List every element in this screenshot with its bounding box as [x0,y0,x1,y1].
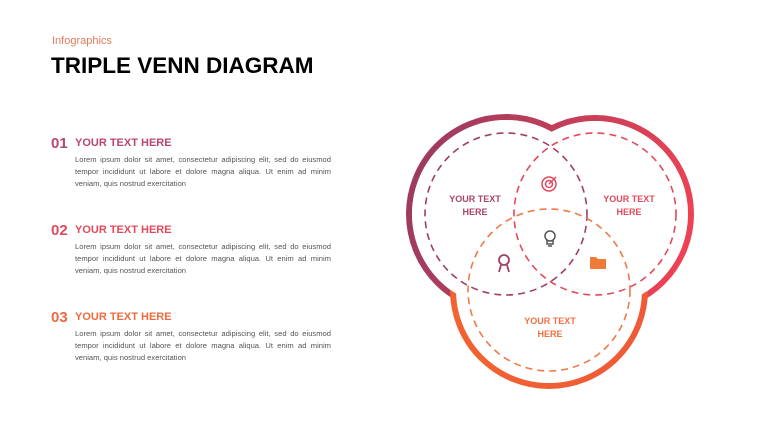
outer outline [409,117,691,386]
item 03 [51,309,331,362]
item 01: Lorem ipsum dolor sit amet, consectetur adipiscing elit, sed do eiusmod tempor incididunt ut labore et dolore magna aliqua. Ut enim ad minim veniam, quis nostrud exercitation [75,155,331,188]
dashed circles [425,133,676,371]
icon: folder [590,257,606,269]
icon: award [499,255,509,272]
item 02: YOUR TEXT HERE [75,224,172,236]
labels: YOUR TEXT [449,194,501,204]
item 02: 02 [51,222,68,239]
labels: YOUR TEXT [524,316,576,326]
icon: lightbulb [545,231,555,246]
labels: HERE [462,207,488,217]
labels: HERE [616,207,642,217]
icon: target [542,177,556,191]
item 01: 01 [51,135,68,152]
item 03: 03 [51,309,68,326]
item 01: YOUR TEXT HERE [75,137,172,149]
item 01 [51,135,331,188]
labels: HERE [537,329,563,339]
item 02 [51,222,331,275]
labels [449,194,655,339]
labels: YOUR TEXT [603,194,655,204]
title: TRIPLE VENN DIAGRAM [51,53,314,78]
item 03: YOUR TEXT HERE [75,311,172,323]
item 03: Lorem ipsum dolor sit amet, consectetur adipiscing elit, sed do eiusmod tempor incididunt ut labore et dolore magna aliqua. Ut enim ad minim veniam, quis nostrud exercitation [75,329,331,362]
subtitle: Infographics [52,35,112,47]
item 02: Lorem ipsum dolor sit amet, consectetur adipiscing elit, sed do eiusmod tempor incididunt ut labore et dolore magna aliqua. Ut enim ad minim veniam, quis nostrud exercitation [75,242,331,275]
